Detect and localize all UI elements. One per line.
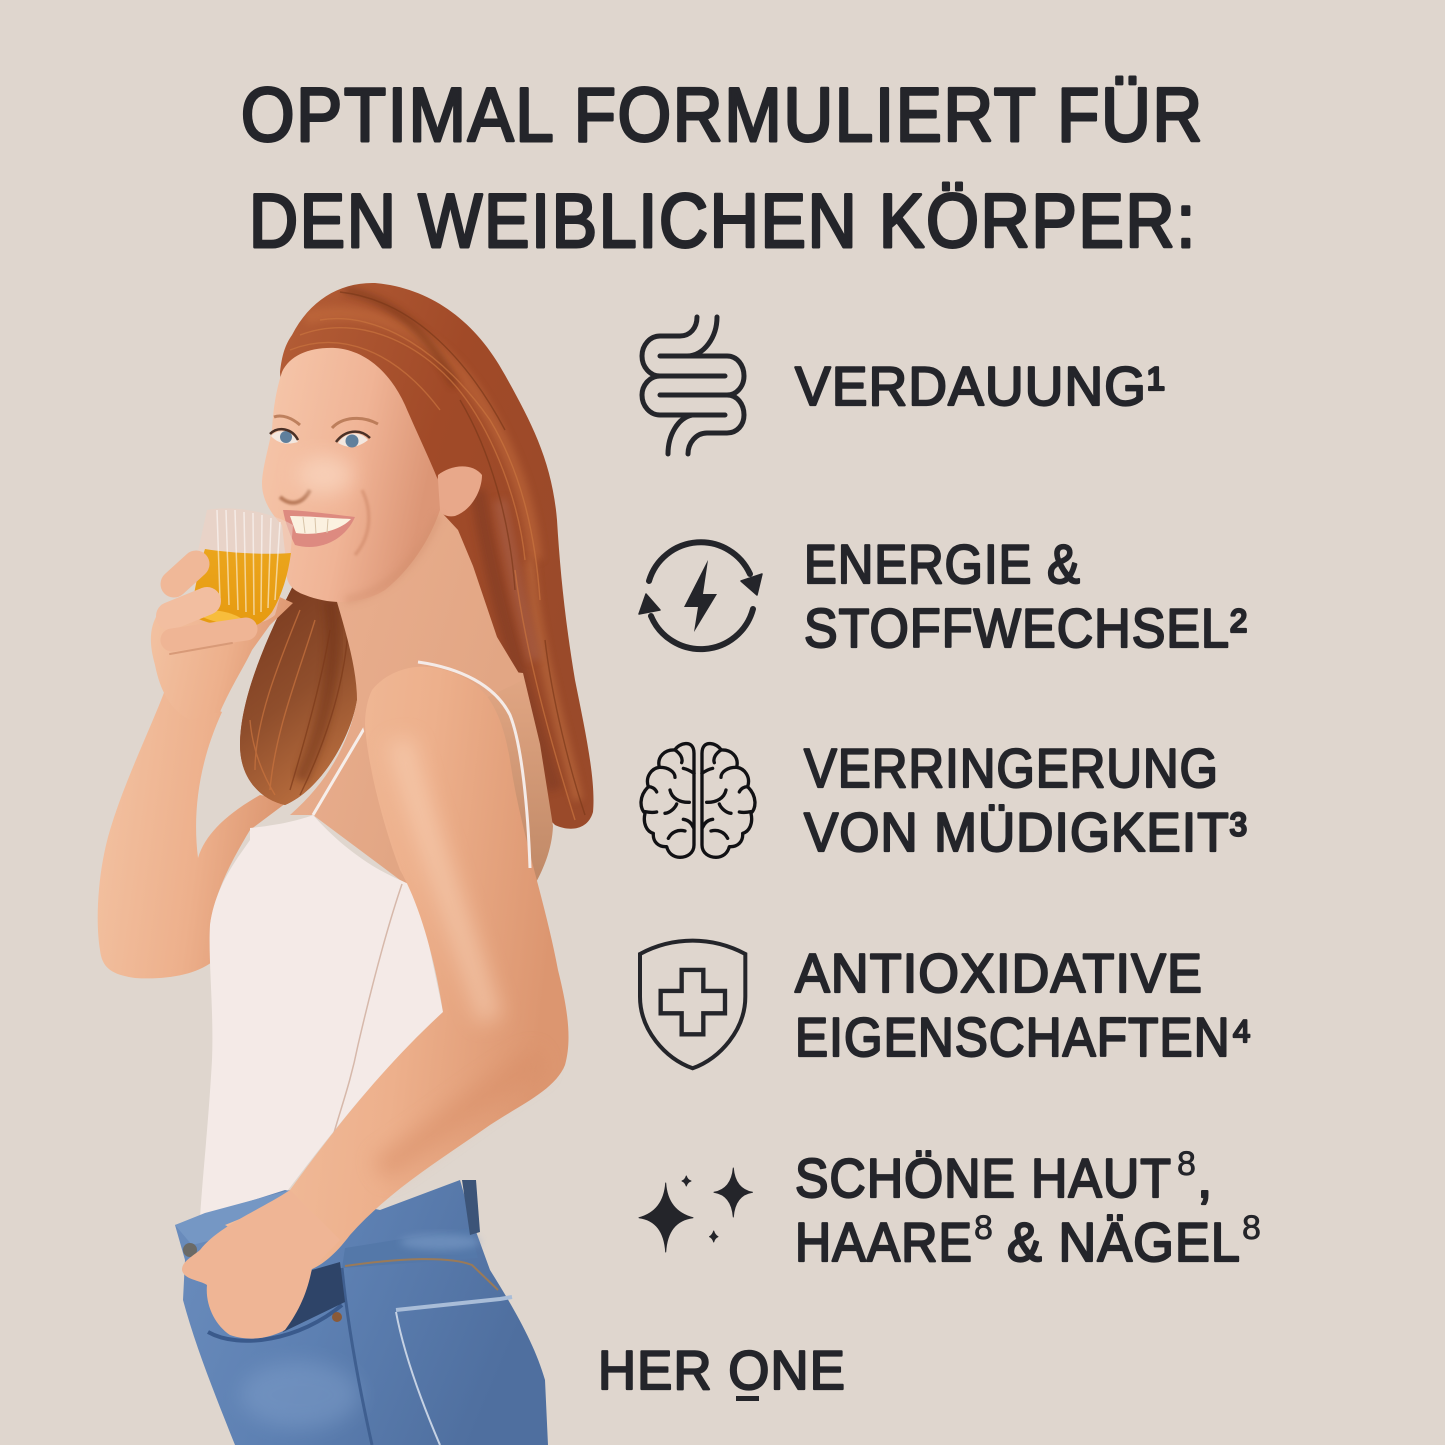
hair — [240, 283, 594, 829]
icon: energy cycle with lightning bolt — [639, 542, 762, 649]
hand in pocket — [182, 1190, 340, 1339]
label: Energie und Stoffwechsel: ENERGIE & — [804, 533, 1081, 595]
label: Schoene Haut, Haare und Naegel: SCHÖNE HAUT — [795, 1147, 1172, 1209]
label: Antioxidative Eigenschaften: EIGENSCHAFTEN⁴ — [795, 1006, 1253, 1068]
back skin — [420, 662, 553, 888]
label: Verdauung: VERDAUUNG¹ — [795, 355, 1166, 417]
label: Verringerung von Muedigkeit: VON MÜDIGKEIT³ — [804, 801, 1248, 863]
shoulder and lowered arm — [225, 667, 569, 1270]
neck shadow under jaw — [345, 515, 438, 600]
camisole — [200, 690, 500, 1218]
smile crease — [355, 490, 369, 555]
title: DEN WEIBLICHEN KÖRPER: — [249, 179, 1197, 264]
face — [262, 348, 440, 602]
label: Energie und Stoffwechsel — [804, 533, 1248, 659]
title — [241, 73, 1204, 264]
icon: sparkles — [639, 1168, 752, 1252]
label: Energie und Stoffwechsel: STOFFWECHSEL² — [804, 597, 1248, 659]
neck and chest — [335, 500, 523, 760]
label: Schoene Haut, Haare und Naegel: , — [1197, 1147, 1213, 1209]
label: Verringerung von Muedigkeit — [804, 737, 1248, 863]
icon: brain — [641, 744, 755, 857]
label: Schoene Haut, Haare und Naegel: 8 — [1242, 1209, 1261, 1247]
cheek highlight — [297, 455, 353, 495]
hand palm — [151, 595, 293, 720]
icon: intestines — [642, 317, 744, 454]
nose shadow — [280, 490, 310, 503]
eyes — [270, 416, 378, 448]
jeans — [175, 1180, 548, 1445]
icon: shield with cross — [640, 941, 745, 1068]
label: Verringerung von Muedigkeit: VERRINGERUNG — [804, 737, 1219, 799]
label: Schoene Haut, Haare und Naegel: 8 — [974, 1209, 993, 1247]
label: Schoene Haut, Haare und Naegel: HAARE — [795, 1211, 973, 1273]
fingers — [170, 564, 246, 654]
ear — [436, 466, 482, 516]
logo: Her One: HER ONE — [598, 1339, 846, 1401]
raised arm — [98, 690, 290, 978]
title: OPTIMAL FORMULIERT FÜR — [241, 73, 1204, 158]
label: Antioxidative Eigenschaften — [795, 942, 1253, 1068]
label: Schoene Haut, Haare und Naegel: & NÄGEL — [1007, 1211, 1241, 1273]
strap — [418, 662, 530, 868]
glass of juice — [190, 508, 293, 628]
label: Schoene Haut, Haare und Naegel — [795, 1145, 1261, 1273]
mouth — [283, 510, 355, 547]
label: Antioxidative Eigenschaften: ANTIOXIDATIVE — [795, 942, 1203, 1004]
label: Schoene Haut, Haare und Naegel: 8 — [1177, 1145, 1196, 1183]
photo: woman drinking juice — [98, 283, 594, 1445]
